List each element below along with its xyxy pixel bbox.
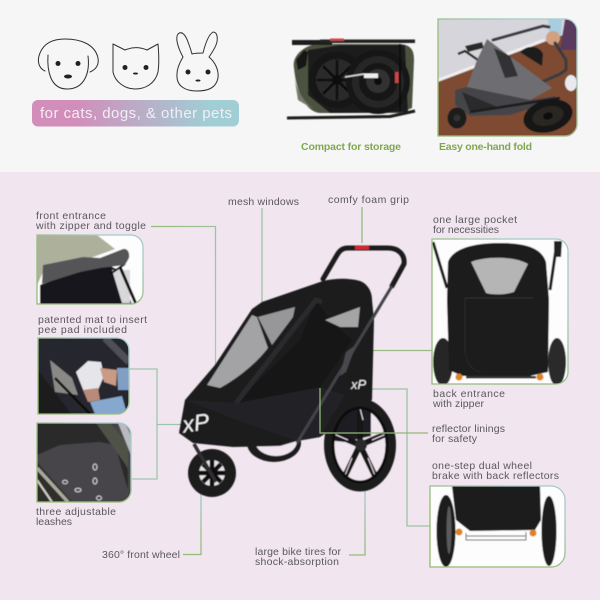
label and thumbnail: back pocket and entrance: for necessities [433, 224, 499, 236]
big rear wheel [324, 398, 396, 492]
label: 360 front wheel: 360° front wheel [102, 549, 180, 561]
caption: compact for storage: Compact for storage [301, 141, 401, 153]
handlebar [323, 248, 404, 286]
callout lines [129, 207, 432, 555]
caption: easy one-hand fold: Easy one-hand fold [439, 141, 532, 153]
label: comfy foam grip: comfy foam grip [328, 194, 409, 206]
far wheel [247, 424, 301, 462]
label and thumbnail: front entrance: with zipper and toggle [35, 220, 146, 232]
rear mesh window [325, 307, 360, 327]
label: large bike tires: shock-absorption [255, 556, 339, 568]
icon: rabbit face [177, 32, 218, 91]
side mesh panel [236, 300, 352, 403]
banner: for cats, dogs and other pets: for cats, dogs, & other pets [40, 105, 232, 122]
icon: cat face [113, 44, 159, 89]
stroller illustration [179, 246, 404, 497]
label and thumbnail: dual wheel brake: brake with back reflectors [432, 470, 559, 482]
label and thumbnail: dual wheel brake [430, 460, 565, 567]
photo: easy one-hand fold [438, 19, 577, 138]
label: reflector linings: reflector linings [432, 423, 505, 435]
canopy body [179, 279, 374, 447]
label: mesh windows: mesh windows [228, 196, 299, 208]
mesh window front [207, 315, 268, 388]
small front wheel [188, 444, 236, 497]
label and thumbnail: back pocket and entrance [432, 214, 568, 410]
label and thumbnail: three leashes: leashes [36, 516, 72, 528]
panel: top section background [0, 0, 600, 172]
canopy seam band [236, 300, 322, 403]
label and thumbnail: dual wheel brake: one-step dual wheel [432, 460, 532, 472]
label and thumbnail: pee pad mat: patented mat to insert [38, 314, 147, 326]
label: reflector linings [432, 423, 505, 445]
frame tube [297, 286, 392, 443]
lower panel [185, 387, 345, 441]
label and thumbnail: front entrance [35, 210, 146, 304]
frame hinge [340, 345, 356, 376]
label and thumbnail: pee pad mat [38, 314, 147, 415]
label and thumbnail: three leashes: three adjustable [36, 506, 116, 518]
label and thumbnail: three leashes [36, 423, 131, 528]
label: large bike tires [255, 546, 342, 568]
callout line: reflector linings [320, 388, 428, 433]
banner: for cats, dogs and other pets [32, 100, 239, 126]
label and thumbnail: back pocket and entrance: with zipper [432, 398, 484, 410]
photo: compact folded stroller [287, 38, 415, 118]
mesh window top [258, 307, 295, 345]
label: reflector linings: for safety [432, 433, 478, 445]
label and thumbnail: pee pad mat: pee pad included [38, 324, 127, 336]
label and thumbnail: back pocket and entrance: back entrance [433, 388, 505, 400]
label: large bike tires: large bike tires for [255, 546, 342, 558]
icon: dog face [38, 39, 98, 89]
red grip tag [355, 246, 369, 250]
label and thumbnail: front entrance: front entrance [36, 210, 106, 222]
panel: features section background [0, 172, 600, 600]
logo rear: xP [350, 377, 366, 392]
label and thumbnail: back pocket and entrance: one large pocket [433, 214, 517, 226]
logo front: xP [180, 408, 212, 438]
